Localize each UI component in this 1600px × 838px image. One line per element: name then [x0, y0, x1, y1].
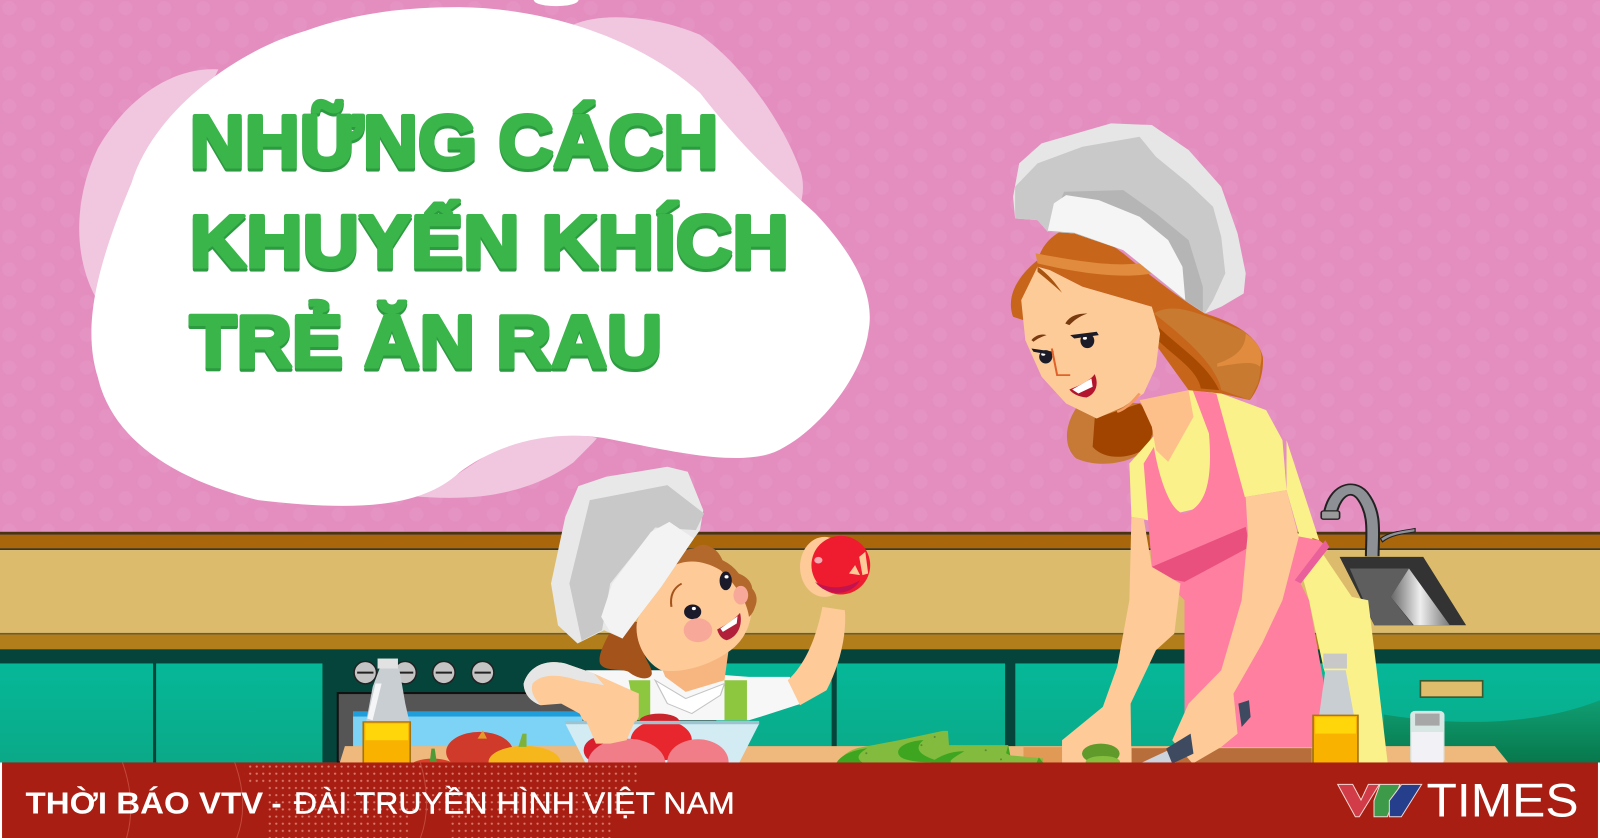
woman's face	[1021, 267, 1160, 418]
woman's pink apron	[1144, 390, 1327, 747]
banner curved lines	[122, 762, 427, 838]
food on the counter: tomatoes and yellow pepper	[410, 730, 560, 778]
VTV Times logo	[1338, 775, 1579, 827]
woman's neck	[1140, 390, 1193, 462]
woman's upper hair	[1011, 231, 1263, 400]
child's facial features	[671, 572, 748, 642]
woman's back skirt in yellow	[1291, 534, 1388, 764]
salt shaker	[1410, 711, 1444, 764]
child's shirt and overall straps	[586, 670, 801, 720]
banner dotted world map texture	[245, 762, 638, 838]
oil bottle by the stove	[363, 659, 410, 764]
knife and cucumber slice	[1082, 700, 1251, 768]
speech bubble back blobs	[79, 17, 803, 498]
oil bottle in front of the woman	[1313, 654, 1358, 764]
kitchen backdrop: rails, tan panel and cabinets	[0, 532, 1600, 762]
child's curly hair	[671, 545, 757, 617]
countertop	[340, 746, 1508, 762]
child's face	[637, 560, 751, 671]
glass bowl of tomatoes	[565, 694, 759, 789]
title	[190, 99, 789, 382]
woman's arms	[1062, 490, 1299, 764]
title: KHUYẾN KHÍCH	[190, 199, 789, 282]
speech bubble	[91, 7, 870, 506]
title: TRẺ ĂN RAU	[190, 299, 662, 382]
VTV mark	[1338, 784, 1422, 817]
woman's chef hat	[1013, 123, 1246, 313]
cucumbers on the cutting board	[837, 731, 1043, 762]
woman's lower hair bob	[1067, 400, 1154, 464]
woman's facial features	[1031, 267, 1140, 412]
child's left sleeve and arm	[524, 662, 639, 744]
child's chef hat	[551, 467, 704, 644]
child's hair back	[599, 620, 652, 678]
title: NHỮNG CÁCH	[190, 99, 718, 182]
banner title text: THỜI BÁO VTV	[26, 784, 264, 821]
sink and faucet	[1321, 490, 1466, 625]
red tomato in hand	[811, 536, 870, 595]
bottom banner	[2, 762, 1598, 838]
background: pink dotted wall	[0, 0, 1600, 535]
small white blob at top edge	[534, 0, 579, 6]
woman chef	[1011, 123, 1388, 768]
TIMES wordmark: TIMES	[1427, 775, 1579, 827]
banner title text: -	[271, 786, 282, 821]
stove: knobs and oven	[338, 661, 583, 762]
banner title text: ĐÀI TRUYỀN HÌNH VIỆT NAM	[294, 785, 735, 821]
child's raised arm holding tomato	[788, 607, 845, 705]
child's neck and collar	[655, 650, 729, 714]
woman's yellow shirt	[1129, 390, 1287, 520]
child chef	[524, 467, 870, 744]
